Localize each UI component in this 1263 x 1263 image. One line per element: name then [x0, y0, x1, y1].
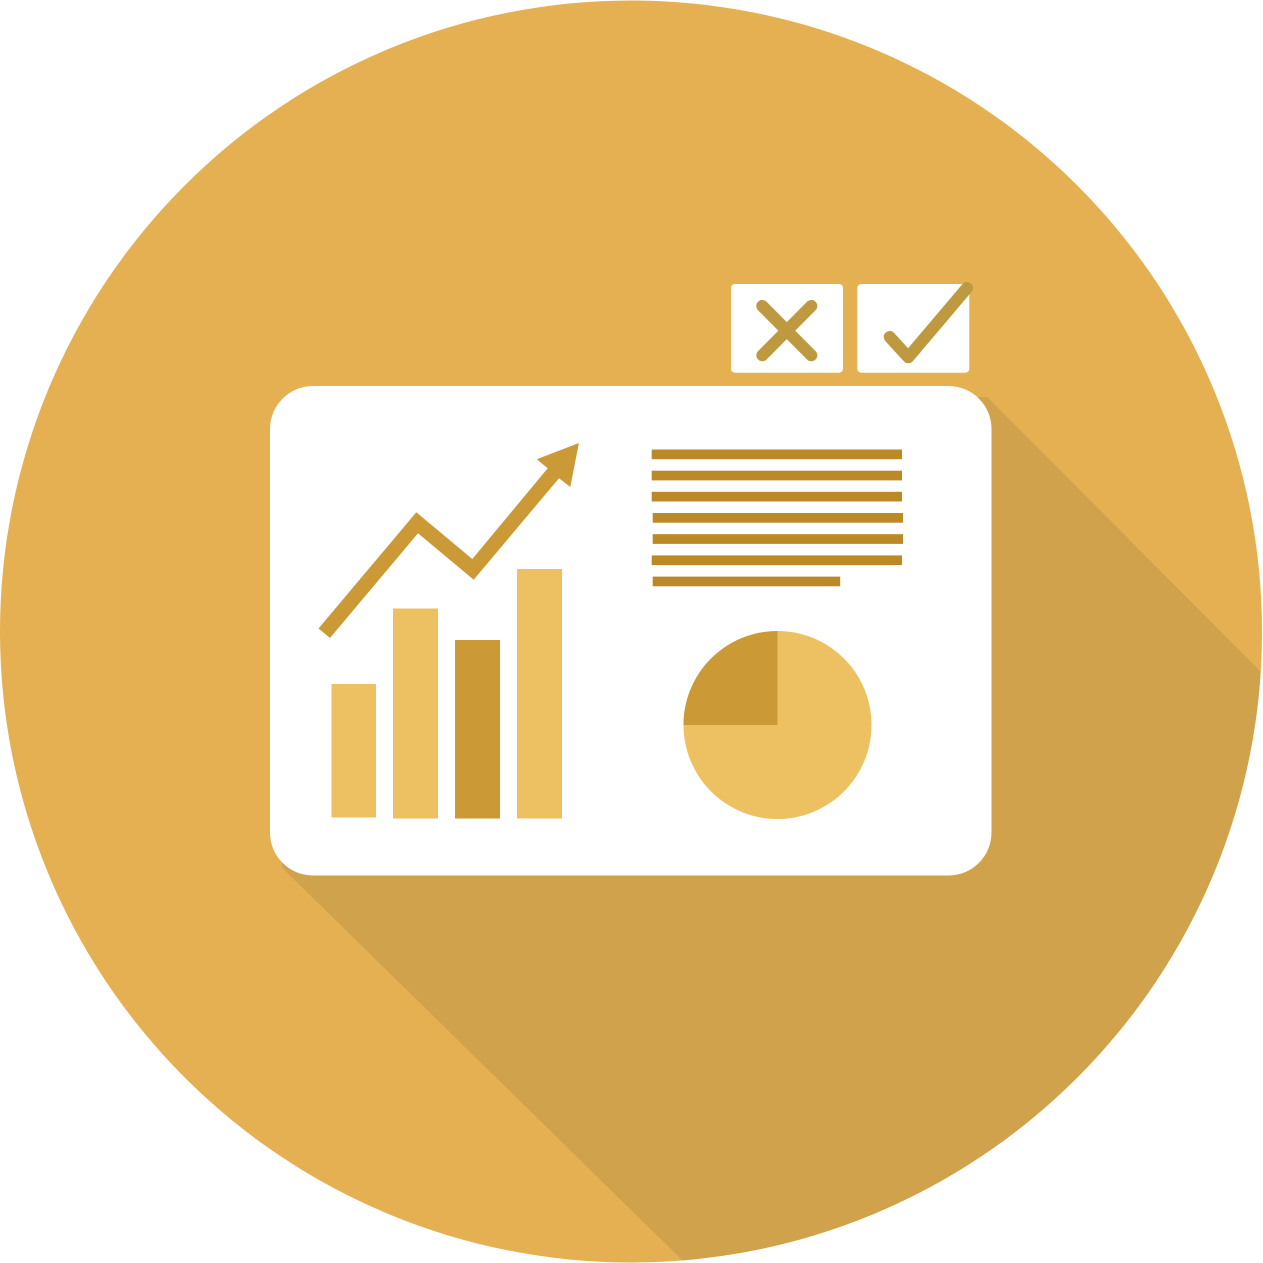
arrow: rising trend line — [318, 443, 579, 638]
text block: placeholder lines — [652, 450, 903, 586]
pie chart — [684, 631, 872, 819]
bar chart — [332, 569, 562, 818]
icon: check box — [857, 284, 969, 373]
long shadow — [282, 397, 1263, 1263]
icon: cross box — [731, 284, 843, 373]
board background — [270, 386, 992, 876]
panel: main board — [270, 386, 992, 876]
